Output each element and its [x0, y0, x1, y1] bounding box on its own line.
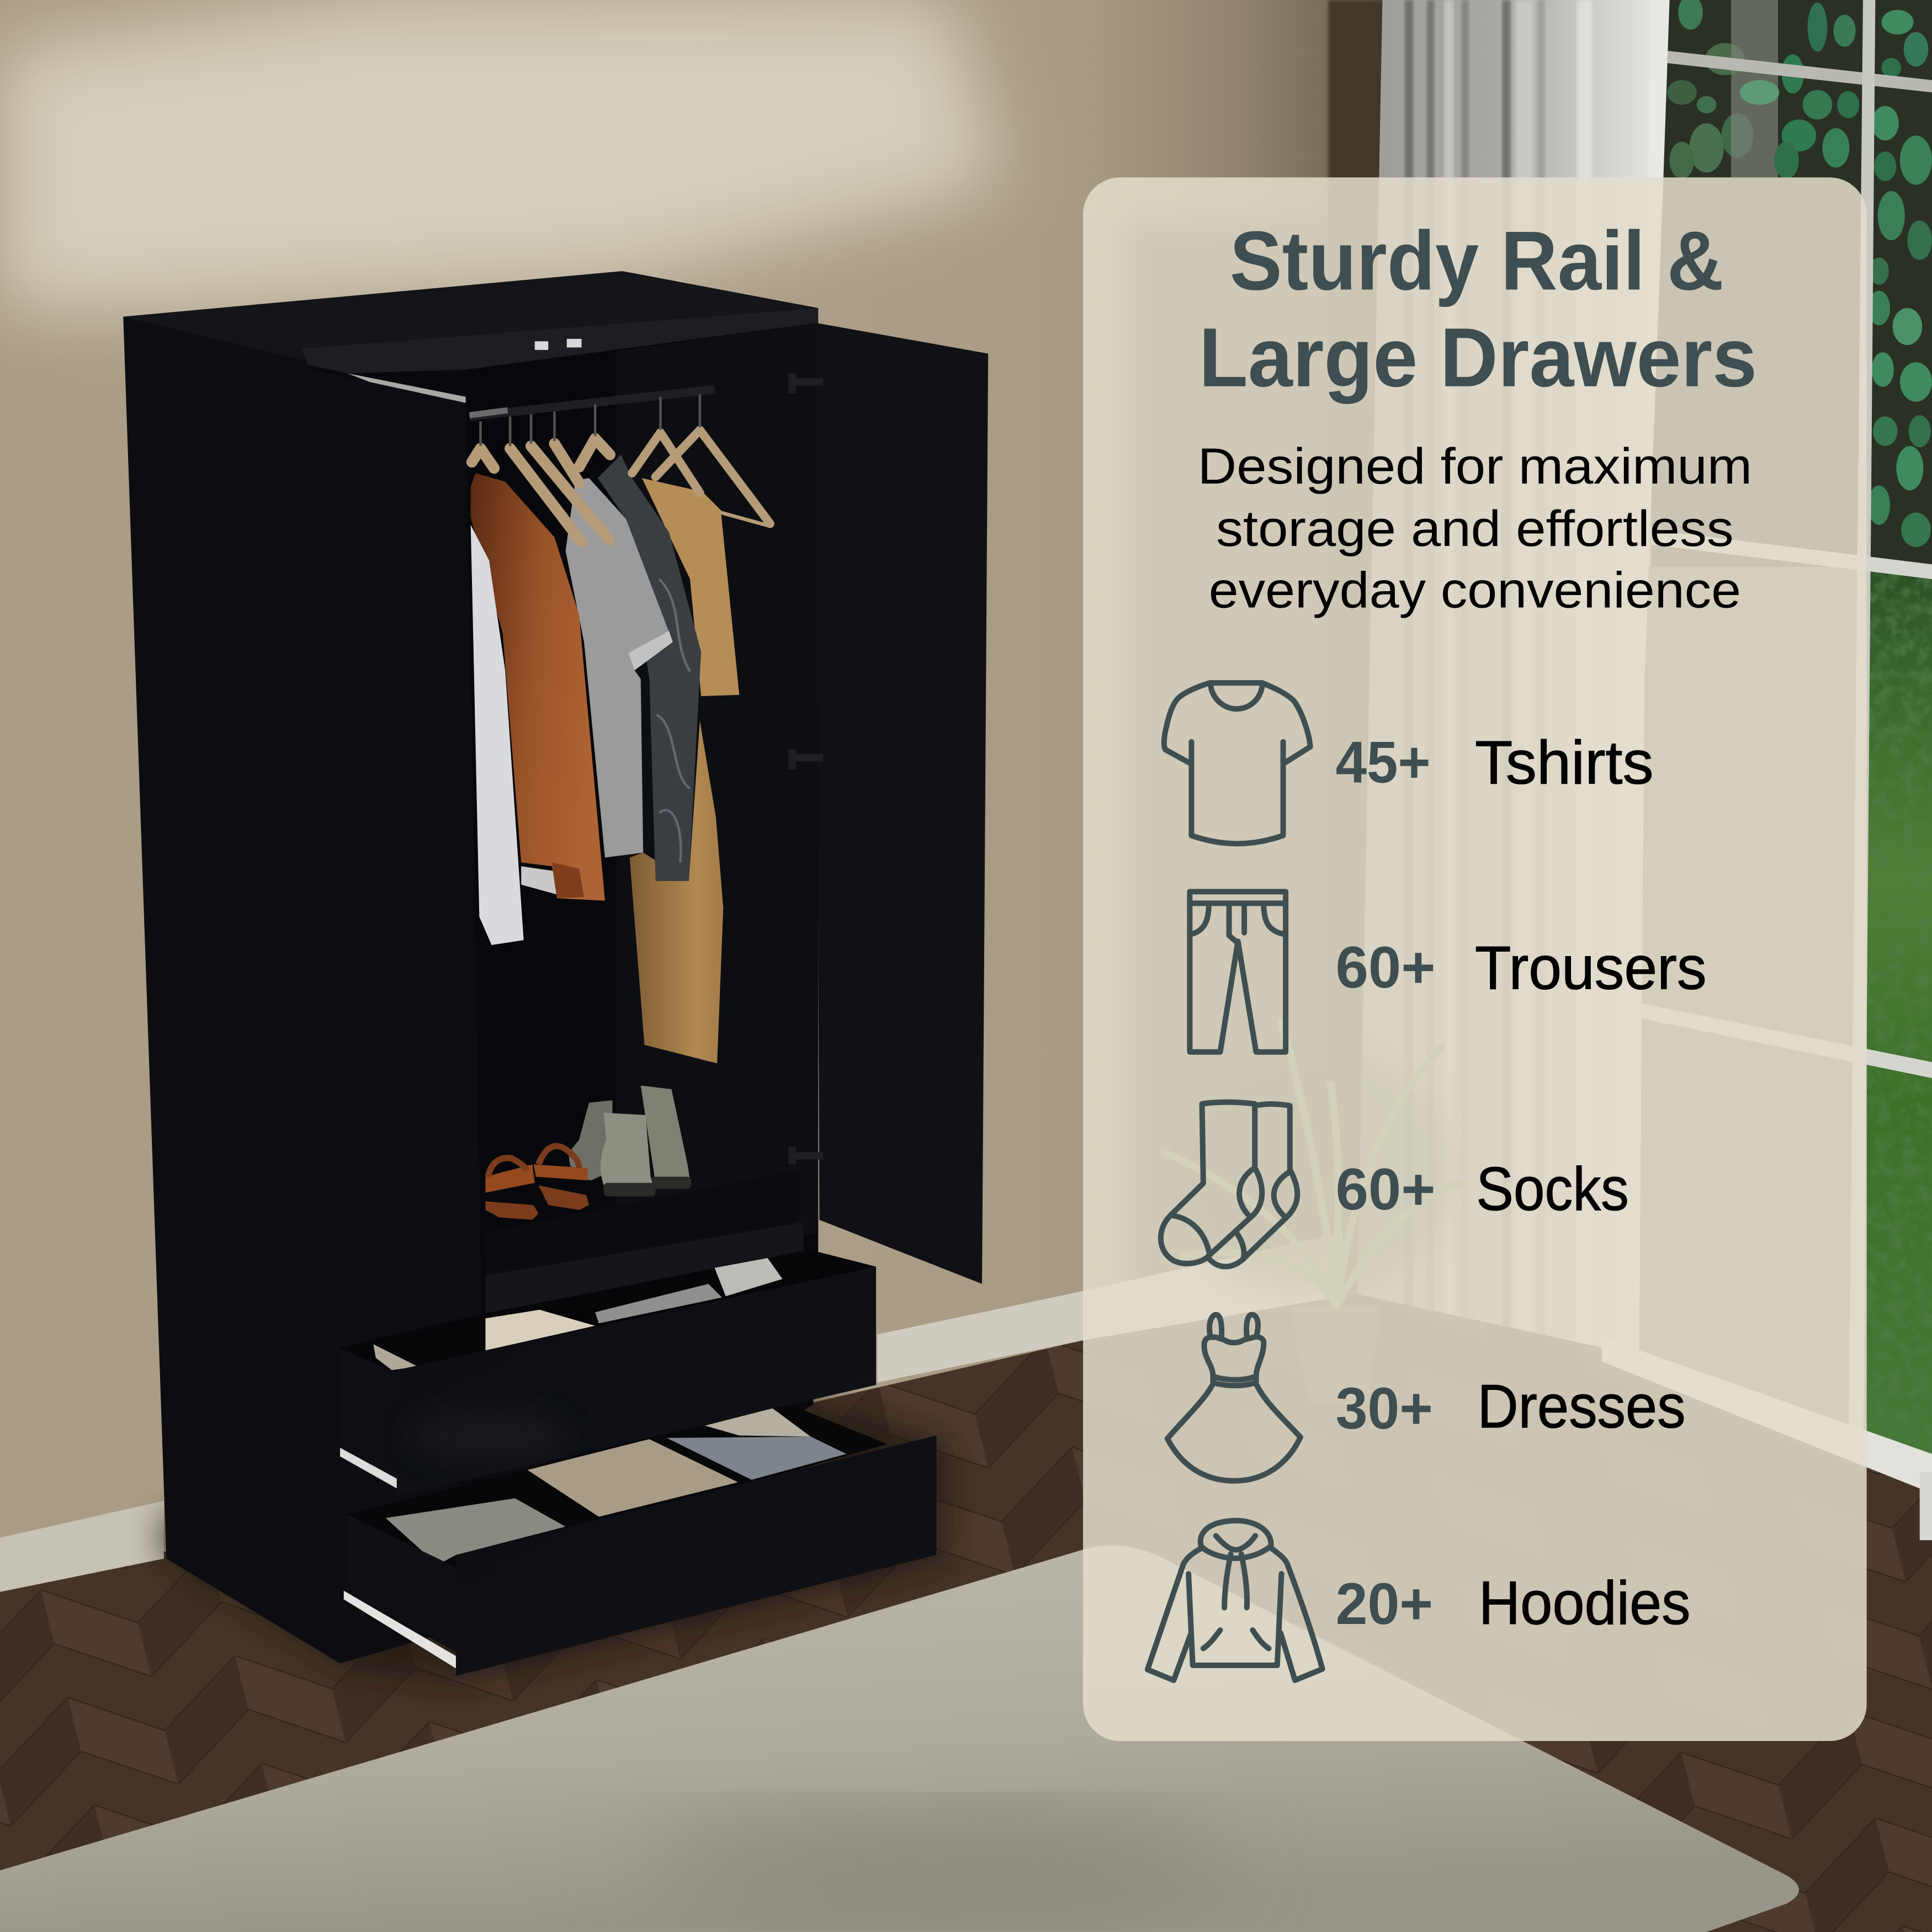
- foliage: [1667, 0, 1932, 547]
- floor: [0, 1294, 1932, 1932]
- door hinges: [789, 373, 823, 1164]
- wall behind panel, darker corner: [1127, 222, 1386, 1306]
- lawn: [1867, 567, 1932, 1454]
- jeans: [386, 1498, 566, 1565]
- drawer side: [346, 1514, 456, 1652]
- drawer side: [339, 1348, 397, 1488]
- subheading: storage and effortless: [1216, 501, 1734, 557]
- boots: [569, 1086, 691, 1196]
- wall dark corner strip: [1328, 0, 1385, 1306]
- subheading: everyday convenience: [1209, 562, 1741, 618]
- label: Socks: [1476, 1154, 1629, 1223]
- wardrobe floor shadow: [160, 1392, 949, 1686]
- drawer interior: [339, 1251, 876, 1373]
- info panel: [1083, 177, 1867, 1741]
- icon: socks: [1161, 1102, 1297, 1267]
- lawn texture: [1867, 567, 1932, 1454]
- top brackets: [535, 341, 548, 350]
- window mullions: [1654, 49, 1932, 92]
- baseboard left: [0, 1501, 164, 1592]
- icon: hoodie: [1148, 1521, 1323, 1680]
- drawer interior: [346, 1405, 887, 1567]
- reflection: [407, 1408, 567, 1463]
- label: Tshirts: [1475, 728, 1654, 797]
- count: 20+: [1336, 1570, 1433, 1637]
- item: trousers: [1190, 891, 1707, 1052]
- potted plant behind panel: [1164, 1023, 1460, 1407]
- upper drawer: [339, 1251, 876, 1496]
- count: 60+: [1336, 1156, 1435, 1222]
- carcass backing: [302, 308, 818, 1663]
- subheading: [1198, 438, 1752, 618]
- shelf top: [483, 1171, 798, 1275]
- sandals: [485, 1146, 589, 1220]
- view through panel: [1614, 567, 1867, 1454]
- drawer front: [456, 1435, 936, 1676]
- top: [123, 271, 818, 360]
- count: 60+: [1336, 934, 1435, 1000]
- left door: [306, 370, 483, 1395]
- plaid: [527, 1439, 738, 1517]
- curtain: [1355, 0, 1650, 1405]
- lower drawer: [344, 1405, 936, 1676]
- item: socks: [1161, 1102, 1629, 1267]
- grey folded: [667, 1437, 846, 1480]
- drawer front: [397, 1267, 876, 1496]
- hangers: [472, 430, 770, 542]
- window frame: [1597, 0, 1670, 1355]
- tan dress: [630, 478, 739, 1063]
- icon: t-shirt: [1164, 683, 1310, 843]
- count: 30+: [1336, 1375, 1433, 1441]
- leather jacket: [471, 473, 605, 901]
- interior: [466, 323, 818, 1325]
- shelf front: [485, 1222, 803, 1313]
- folded clothes upper: [485, 1310, 595, 1350]
- right door: [816, 323, 988, 1284]
- window exterior: [1597, 0, 1932, 1479]
- window sill: [1602, 1337, 1932, 1493]
- cream folded: [705, 1408, 811, 1437]
- heading: Sturdy Rail &: [1230, 215, 1724, 308]
- top front lip: [302, 308, 818, 373]
- grey tee: [566, 478, 673, 858]
- icon: dress: [1167, 1315, 1301, 1481]
- wall: [0, 0, 1386, 1602]
- hanger hooks: [481, 394, 700, 446]
- item: dresses: [1167, 1315, 1686, 1481]
- icon: trousers: [1190, 891, 1286, 1052]
- white under-shirt strip: [521, 866, 557, 895]
- baseboard right: [877, 1232, 1343, 1382]
- item: tshirts: [1164, 683, 1654, 843]
- rug shadow: [641, 1817, 1232, 1904]
- rug: [0, 1546, 1799, 1932]
- label: Dresses: [1477, 1372, 1686, 1441]
- label: Hoodies: [1479, 1568, 1690, 1637]
- slide rail: [340, 1448, 397, 1488]
- label: Trousers: [1475, 933, 1707, 1002]
- white shirt: [471, 525, 524, 945]
- panel background: [1083, 177, 1867, 1741]
- count: 45+: [1336, 729, 1431, 795]
- subheading: Designed for maximum: [1198, 438, 1752, 495]
- item: hoodies: [1148, 1521, 1690, 1680]
- patterned dark garment: [598, 455, 701, 881]
- hanging rail: [469, 389, 715, 416]
- interior right partition: [616, 323, 818, 1269]
- heading: [1199, 215, 1757, 405]
- wardrobe: [123, 271, 988, 1676]
- side panel: [123, 317, 483, 1663]
- wall light patch: [0, 0, 998, 308]
- slide rail: [344, 1591, 456, 1668]
- door edge highlight: [347, 373, 466, 403]
- heading: Large Drawers: [1199, 311, 1757, 405]
